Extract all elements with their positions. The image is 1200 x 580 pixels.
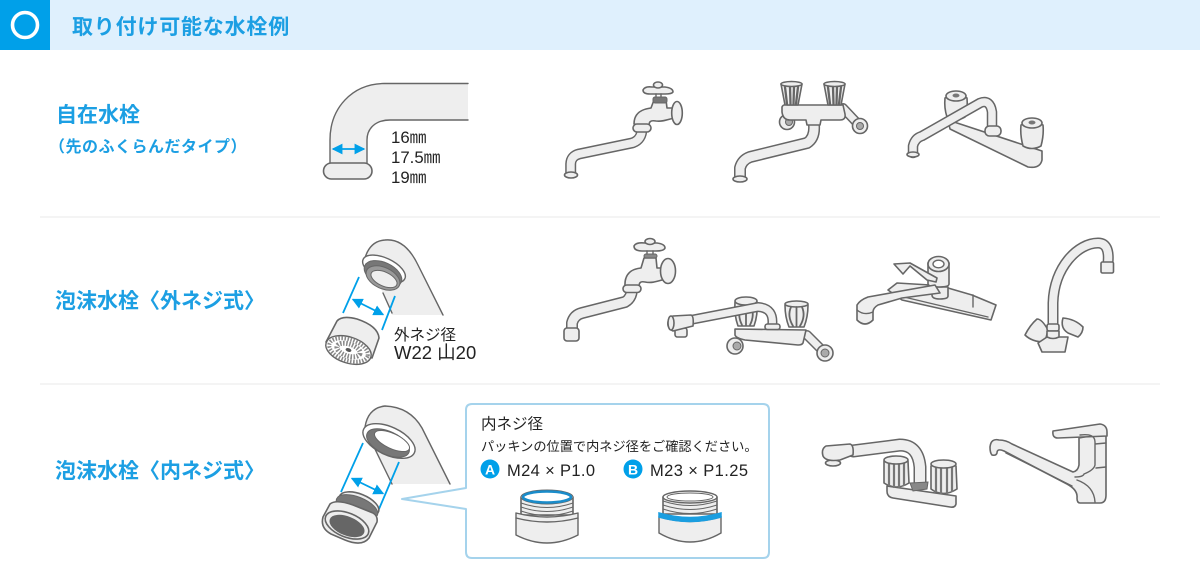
header bar <box>0 0 1200 50</box>
size A: M24 × P1.0 <box>507 462 595 480</box>
callout: internal thread check <box>402 404 769 558</box>
diagram: internal thread aerator <box>321 406 450 545</box>
text: external thread size: 外ネジ径 <box>394 326 457 344</box>
aerator with mesh <box>322 317 379 370</box>
text: external thread size <box>394 326 476 363</box>
callout heading: 内ネジ径 <box>481 415 544 433</box>
faucet: three-hole deck mixer <box>907 91 1043 167</box>
size B: B <box>628 462 638 478</box>
text: swivel spout sizes <box>391 128 441 187</box>
adapter A with blue packing on top <box>516 490 578 543</box>
size A: A <box>485 462 495 478</box>
faucet: wall tap with extended spout <box>564 238 676 341</box>
diagram: external thread aerator <box>322 240 443 370</box>
text: external thread size: W22 山20 <box>394 342 476 363</box>
heading: 自在水栓: （先のふくらんだタイプ） <box>49 137 247 156</box>
size B: M23 × P1.25 <box>650 462 748 480</box>
diagram: swivel spout diameter <box>324 84 468 179</box>
size B <box>624 460 748 480</box>
adapter B with blue packing at base <box>659 491 721 542</box>
faucet: single-lever deck mixer with flat handle <box>990 424 1107 503</box>
heading: 泡沫水栓 外ネジ式: 泡沫水栓〈外ネジ式〉 <box>55 290 265 313</box>
adapter <box>321 487 382 545</box>
faucet: two-handle deck mixer <box>822 444 957 507</box>
icon: circle mark <box>0 0 50 50</box>
faucet: single-lever deck mixer <box>857 256 996 324</box>
text: swivel spout sizes: 19㎜ <box>391 168 427 187</box>
heading: 自在水栓: 自在水栓 <box>56 104 140 127</box>
text: swivel spout sizes: 17.5㎜ <box>391 148 441 167</box>
faucet: wall tap with swivel spout <box>564 82 682 178</box>
faucet: two-handle wall mixer with long spout <box>668 297 833 361</box>
faucet: gooseneck two-handle mixer <box>1025 243 1114 352</box>
callout text: パッキンの位置で内ネジ径をご確認ください。 <box>481 439 758 454</box>
heading: 自在水栓 <box>49 104 247 156</box>
title: 取り付け可能な水栓例 <box>72 16 290 39</box>
blue dimension lines <box>341 443 399 509</box>
text: swivel spout sizes: 16㎜ <box>391 128 427 147</box>
size A <box>480 460 595 480</box>
blue dimension lines <box>343 277 395 330</box>
faucet: two-handle wall mixer <box>733 82 868 182</box>
heading: 泡沫水栓 内ネジ式: 泡沫水栓〈内ネジ式〉 <box>55 460 265 483</box>
